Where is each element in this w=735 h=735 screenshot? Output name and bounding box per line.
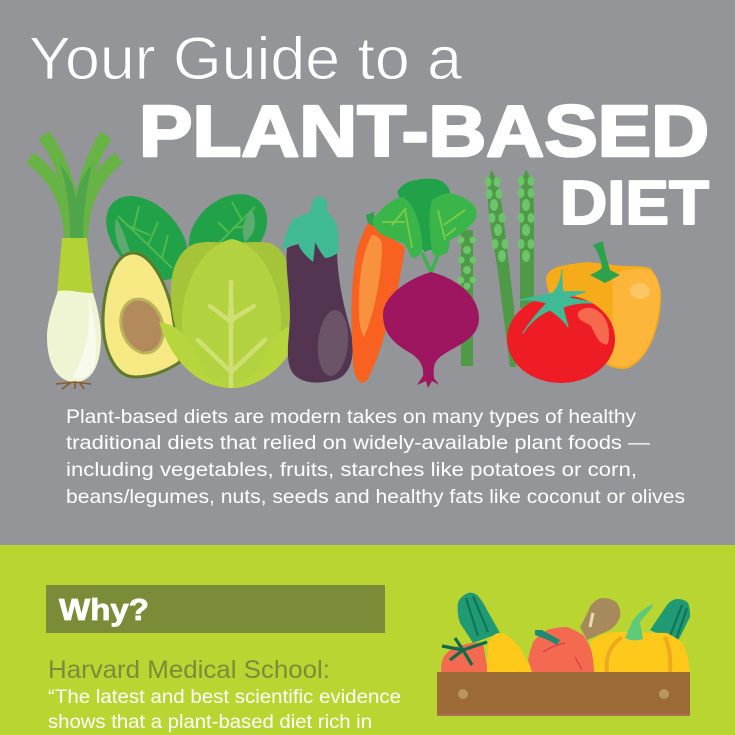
icon: lettuce bbox=[159, 239, 303, 388]
heading: Why? bar bbox=[46, 585, 385, 633]
paragraph: intro: traditional diets that relied on widely-available plant foods — bbox=[66, 432, 651, 454]
crate box bbox=[437, 672, 690, 716]
icon: asparagus stalk behind beet bbox=[458, 230, 476, 366]
icon: carrot bbox=[352, 212, 405, 383]
icon: tomato bbox=[507, 270, 615, 383]
icon: yellow bell pepper bbox=[546, 241, 661, 369]
icon: potato bbox=[580, 598, 620, 640]
paragraph: intro: including vegetables, fruits, starches like potatoes or corn, bbox=[66, 459, 637, 481]
icon: yellow squash bbox=[487, 633, 532, 672]
paragraph: intro: Plant-based diets are modern takes on many types of healthy bbox=[66, 406, 636, 428]
icon: cucumbers bbox=[458, 593, 690, 643]
icon: vegetable crate bbox=[437, 593, 690, 716]
text block: Harvard Medical School quote bbox=[48, 656, 401, 733]
title line: DIET: DIET bbox=[560, 169, 709, 238]
title line: PLANT-BASED: PLANT-BASED bbox=[139, 92, 709, 172]
text block: Harvard Medical School quote: shows that a plant-based diet rich in bbox=[48, 711, 372, 733]
icon: beet bbox=[372, 179, 479, 388]
icon: asparagus stalks bbox=[484, 170, 534, 367]
panel: why section background bbox=[0, 545, 735, 735]
heading: Why? bar: Why? bbox=[59, 592, 149, 627]
title line: Your Guide to a: Your Guide to a bbox=[29, 25, 463, 92]
icon: eggplant bbox=[282, 197, 353, 383]
icon: leek bbox=[30, 135, 119, 389]
icon: spinach leaves bbox=[90, 179, 282, 296]
icon: red bell pepper bbox=[528, 627, 594, 672]
paragraph: intro bbox=[66, 406, 685, 508]
text block: Harvard Medical School quote: Harvard Medical School: bbox=[48, 656, 330, 684]
icon: pumpkin bbox=[590, 604, 690, 672]
icon: tomato in crate bbox=[441, 638, 488, 672]
text block: Harvard Medical School quote: “The latest and best scientific evidence bbox=[48, 686, 401, 708]
paragraph: intro: beans/legumes, nuts, seeds and healthy fats like coconut or olives bbox=[66, 486, 685, 508]
icon: avocado half bbox=[103, 253, 180, 377]
